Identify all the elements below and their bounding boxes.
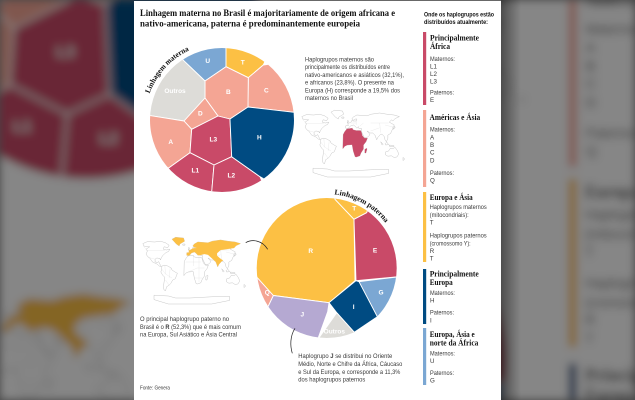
cell labels: U (205, 58, 210, 65)
cell: Q (258, 277, 274, 306)
legend group: Europa, Ásia e norte da África: U (430, 358, 434, 365)
text block: J note: Haplogrupo J se distribui no Oriente (298, 353, 393, 360)
cell: B (205, 67, 248, 119)
cell labels: C (264, 87, 269, 94)
legend group: Europa e Ásia: Haplogrupos paternos (430, 233, 487, 240)
cell labels: D (198, 111, 203, 118)
legend group: Principalmente Europa: H (430, 298, 434, 305)
cell labels: H (257, 135, 262, 142)
cell: E (354, 190, 405, 281)
legend group: Principalmente Europa (423, 269, 479, 324)
cell: T paternal (334, 198, 368, 220)
legend group: Europa, Ásia e norte da África: norte da África (430, 338, 478, 348)
text block: maternal note: Europa (H) corresponde a 19,5% dos (305, 87, 400, 94)
cell: L2 (211, 157, 270, 200)
text block: maternal note: maternos no Brasil (305, 95, 353, 102)
legend group: Principalmente África: Principalmente (430, 34, 479, 42)
legend group: Principalmente Europa: Europa (430, 278, 453, 287)
cell: Outros paternal (320, 312, 354, 338)
legend group: Américas e Ásia: Maternos: (430, 127, 455, 134)
legend group: Américas e Ásia: A (430, 134, 435, 141)
text block: J note: Médio, Norte e Chifre da África, Cáucaso (298, 361, 403, 368)
legend group: Principalmente Europa: I (430, 317, 432, 324)
legend group: Américas e Ásia: D (430, 157, 435, 164)
legend group: Principalmente África: Paternos: (430, 90, 454, 97)
cell labels: Q (265, 289, 270, 296)
legend group: Europa e Ásia: Haplogrupos maternos (430, 204, 487, 211)
legend group: Principalmente África: África (430, 41, 450, 51)
legend group: Américas e Ásia (423, 110, 480, 187)
cell: T (226, 48, 264, 77)
legend group: Europa, Ásia e norte da África: G (430, 377, 435, 384)
legend group: Europa e Ásia: Europa e Ásia (430, 192, 473, 202)
text block: paternal R note: O principal haplogrupo paterno no (140, 316, 230, 323)
cell labels (164, 58, 269, 179)
cell: U (183, 48, 226, 80)
cell labels: Outros (324, 329, 345, 336)
chart: paternal lineage voronoi circle (245, 190, 405, 345)
cell labels: Outros (164, 88, 186, 95)
cell: L3 (190, 116, 232, 165)
legend heading: distribuídos atualmente: (424, 19, 488, 26)
title: nativo-americana, paterna é predominantemente europeia (140, 18, 360, 30)
arrow: map to R cell (246, 241, 268, 249)
legend group: Principalmente África: L3 (430, 79, 437, 86)
legend group: Principalmente África: E (430, 97, 434, 104)
text block: J note: dos haplogrupos paternos (298, 377, 365, 384)
legend group: Principalmente África: Maternos: (430, 56, 455, 63)
legend group: Américas e Ásia: B (430, 142, 434, 149)
legend group: Principalmente África: L1 (430, 64, 437, 71)
cell: D (184, 98, 218, 129)
cell labels (265, 206, 384, 336)
map: Africa highlighted (302, 110, 405, 177)
legend group: Principalmente Europa: Maternos: (430, 290, 455, 297)
cell: R (256, 198, 355, 302)
cell: Outros (150, 60, 206, 120)
legend group: Europa, Ásia e norte da África: Europa, Ásia e (430, 329, 475, 339)
cell labels: E (373, 247, 378, 254)
legend group: Europa e Ásia (423, 192, 487, 263)
legend group: Principalmente África (423, 32, 479, 105)
legend group: Europa, Ásia e norte da África (423, 328, 478, 385)
text block: maternal note: e africanos (23,8%). O presente na (305, 80, 395, 87)
cell labels: A (168, 139, 173, 146)
legend group: Principalmente Europa: Principalmente (430, 270, 479, 278)
legend group: Américas e Ásia: Paternos: (430, 170, 454, 177)
legend group: Europa, Ásia e norte da África: Maternos: (430, 351, 455, 358)
cell labels: B (226, 89, 231, 96)
cell: J (268, 295, 329, 338)
cell: A (140, 114, 192, 170)
cell labels: L1 (192, 167, 199, 174)
legend group: Principalmente África: L2 (430, 71, 437, 78)
cell labels: T (241, 60, 245, 67)
text block: maternal note: nativo-americanos e asiáticos (32,1%), (305, 72, 404, 79)
legend group: Américas e Ásia: C (430, 149, 435, 156)
legend heading: Onde os haplogrupos estão (424, 12, 494, 19)
legend group: Europa e Ásia: T (430, 256, 434, 263)
legend group: Europa e Ásia: R (430, 248, 435, 255)
cell labels: J (300, 311, 304, 318)
cell: I (329, 281, 377, 332)
cell labels: I (353, 304, 355, 311)
cell labels: T (352, 206, 356, 213)
legend group: Américas e Ásia: Q (430, 178, 435, 185)
legend group: Europa e Ásia: (mitocondriais): (430, 212, 469, 219)
chart: maternal lineage voronoi circle (140, 30, 300, 200)
cell: C (248, 64, 294, 112)
legend group: Europa e Ásia: T (430, 220, 434, 227)
text block: maternal note: principalmente os distribuídos entre (305, 64, 390, 71)
cell labels: L3 (210, 136, 217, 143)
text block: paternal R note: Brasil é o R (52,3%) que é mais comum (140, 324, 241, 331)
text block: paternal R note (140, 316, 241, 338)
map: Europe and Asia highlighted (143, 237, 246, 304)
legend group: Américas e Ásia: Américas e Ásia (430, 112, 480, 122)
text block: J note: e Sul da Europa, e corresponde a 11,3% (298, 369, 401, 376)
title (140, 8, 396, 30)
cell labels: G (378, 290, 384, 297)
cell: L1 (150, 153, 214, 200)
cell: G (359, 276, 405, 320)
text block: paternal R note: na Europa, Sul Asiático e Ásia Central (140, 331, 237, 338)
title: Linhagem materna no Brasil é majoritariamente de origem africana e (140, 8, 396, 19)
source: Fonte: Genera (140, 385, 171, 391)
curved heading: Linhagem materna: Linhagem materna (145, 48, 189, 94)
cell labels: L2 (228, 172, 235, 179)
legend heading (424, 12, 494, 26)
text block: maternal note: Haplogrupos maternos são (305, 57, 375, 64)
white page panel (134, 1, 501, 400)
legend group: Europa e Ásia: (cromossomo Y): (430, 241, 471, 248)
cell: H (230, 107, 300, 200)
cell labels: R (308, 248, 313, 255)
text block: maternal note (305, 57, 404, 102)
legend group: Principalmente Europa: Paternos: (430, 310, 454, 317)
arrow: J cell to note (291, 328, 295, 353)
text block: J note (298, 353, 403, 384)
legend group: Europa, Ásia e norte da África: Paternos: (430, 370, 454, 377)
curved heading: Linhagem paterna: Linhagem paterna (334, 190, 388, 223)
